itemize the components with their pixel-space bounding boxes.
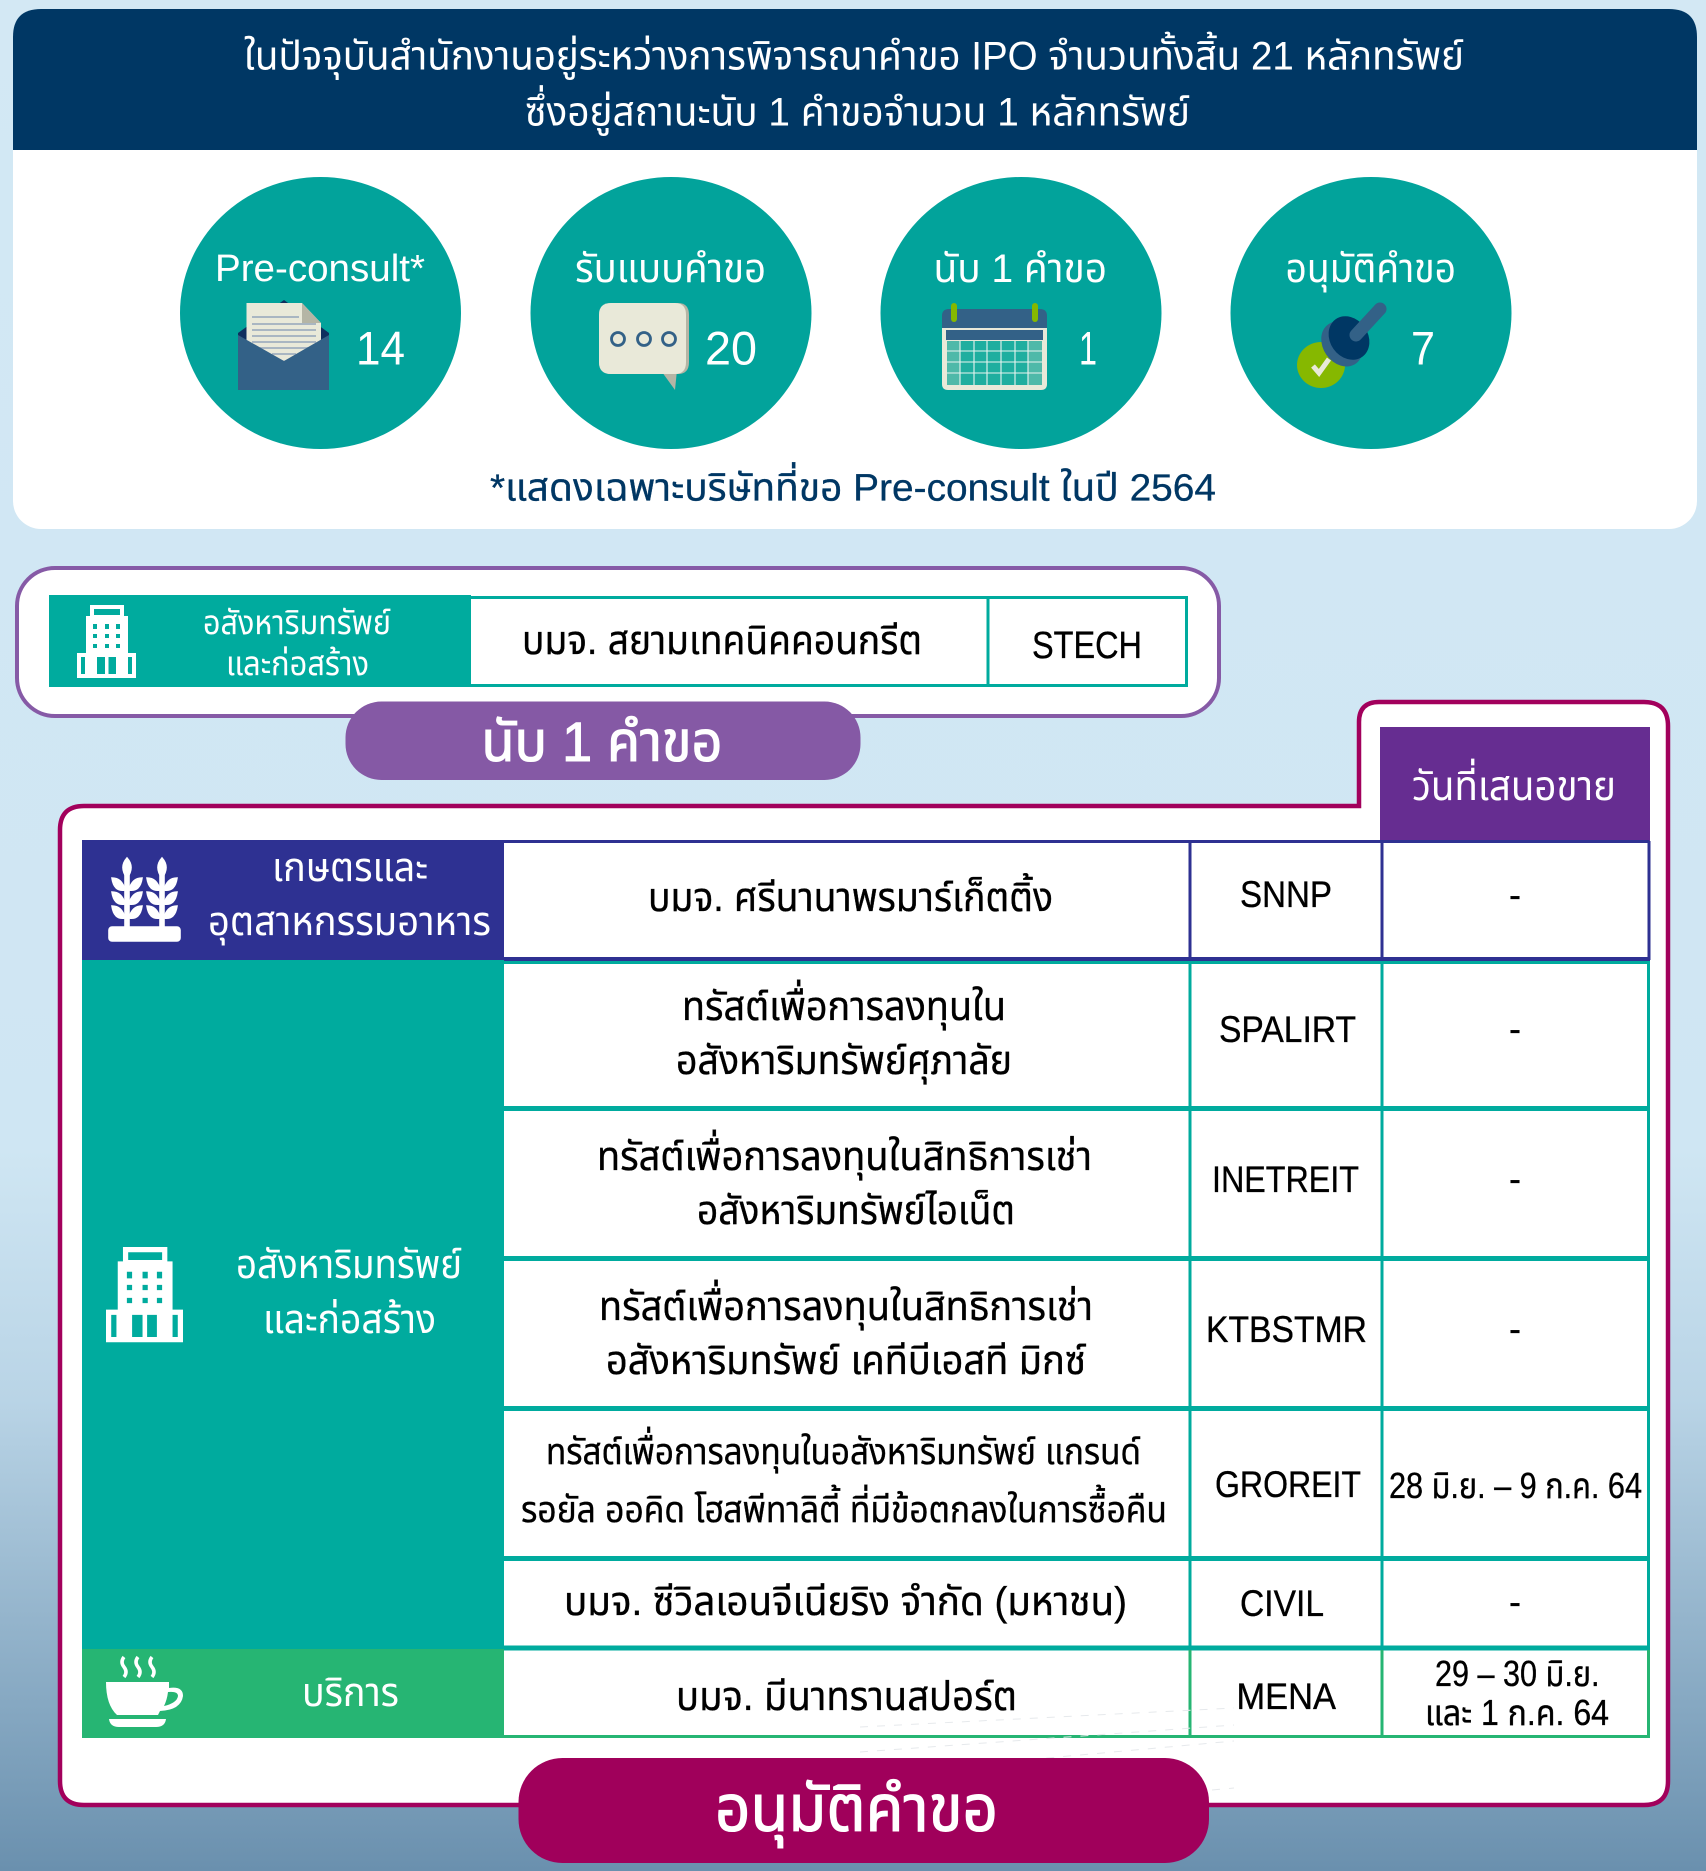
label pill: approved filings: อนุมัติคำขอ — [715, 1772, 998, 1848]
icon: speech bubble — [599, 303, 689, 390]
row: GROREIT — [521, 1426, 1642, 1530]
row: INETREIT: - — [1509, 1158, 1521, 1199]
table row: agro and food: อุตสาหกรรมอาหาร — [208, 900, 491, 945]
row: SPALIRT: อสังหาริมทรัพย์ศุภาลัย — [676, 1039, 1012, 1084]
stat: filing received: รับแบบคำขอ — [575, 247, 766, 291]
table row: services: MENA — [1236, 1676, 1336, 1717]
table row: agro and food: - — [1509, 874, 1521, 915]
table section: property and construction: และก่อสร้าง — [263, 1298, 436, 1342]
stat: approved: อนุมัติคำขอ — [1286, 247, 1456, 292]
table row: services — [82, 1649, 1650, 1738]
label pill: approved filings — [518, 1758, 1209, 1863]
header band — [13, 9, 1697, 150]
row: GROREIT: รอยัล ออคิด โฮสพีทาลิตี้ ที่มีข้อตกลงในการซื้อคืน — [521, 1484, 1167, 1530]
row: STECH: และก่อสร้าง — [226, 645, 369, 683]
stat: pre-consult — [180, 177, 461, 449]
stat: approved — [1230, 177, 1512, 449]
table row: services: และ 1 ก.ค. 64 — [1425, 1692, 1609, 1733]
panel: counted as one filing — [17, 568, 1219, 716]
label pill: counted as one filing — [346, 702, 860, 780]
panel: approved filings — [60, 702, 1668, 1805]
icon: calendar — [942, 303, 1047, 390]
row: SPALIRT — [676, 979, 1521, 1084]
table row: services: บมจ. มีนาทรานสปอร์ต — [676, 1675, 1017, 1719]
table row: agro and food: เกษตรและ — [272, 846, 428, 890]
stat: pre-consult: 14 — [356, 322, 405, 374]
table row: services: 29 – 30 มิ.ย. — [1435, 1653, 1600, 1694]
row: KTBSTMR: ทรัสต์เพื่อการลงทุนในสิทธิการเช่า — [599, 1279, 1093, 1330]
table section: property and construction: อสังหาริมทรัพย์ — [236, 1243, 462, 1287]
table header: offering date: วันที่เสนอขาย — [1412, 758, 1616, 809]
row: SPALIRT: ทรัสต์เพื่อการลงทุนใน — [682, 979, 1006, 1030]
heading line 1: ในปัจจุบันสำนักงานอยู่ระหว่างการพิจารณาคำขอ IPO จำนวนทั้งสิ้น 21 หลักทรัพย์ — [244, 31, 1464, 80]
stat: counted as one filing — [880, 177, 1162, 449]
table header: offering date — [1380, 727, 1650, 841]
row: STECH — [49, 595, 1186, 686]
row: STECH: บมจ. สยามเทคนิคคอนกรีต — [522, 619, 922, 663]
icon: coffee cup — [106, 1657, 183, 1727]
row: INETREIT: INETREIT — [1212, 1159, 1359, 1200]
footnote: *แสดงเฉพาะบริษัทที่ขอ Pre-consult ในปี 2564 — [490, 462, 1216, 510]
row: CIVIL: CIVIL — [1240, 1583, 1324, 1624]
table section: property and construction — [82, 960, 1650, 1650]
row: SPALIRT: - — [1509, 1008, 1521, 1049]
row: CIVIL: บมจ. ซีวิลเอนจีเนียริง จำกัด (มหาชน) — [564, 1580, 1127, 1624]
row: GROREIT: ทรัสต์เพื่อการลงทุนในอสังหาริมทรัพย์ แกรนด์ — [546, 1426, 1141, 1474]
stat: pre-consult: Pre-consult* — [215, 248, 425, 290]
table row: agro and food: บมจ. ศรีนานาพรมาร์เก็ตติ้ง — [648, 872, 1053, 920]
row: INETREIT — [597, 1129, 1521, 1233]
row: CIVIL — [564, 1580, 1521, 1624]
icon: building — [77, 605, 136, 678]
row: STECH: อสังหาริมทรัพย์ — [203, 604, 391, 642]
stat: counted as one filing: 1 — [1079, 322, 1097, 374]
table row: agro and food: SNNP — [1240, 874, 1332, 915]
stat: filing received — [530, 177, 812, 449]
icon: building — [106, 1247, 183, 1342]
row: STECH: STECH — [1032, 625, 1142, 667]
row: KTBSTMR: KTBSTMR — [1206, 1309, 1367, 1350]
panel: IPO summary — [13, 9, 1697, 529]
row: GROREIT: 28 มิ.ย. – 9 ก.ค. 64 — [1389, 1465, 1642, 1506]
label pill: counted as one filing: นับ 1 คำขอ — [482, 710, 722, 773]
table row: agro and food — [82, 840, 1650, 962]
row: INETREIT: ทรัสต์เพื่อการลงทุนในสิทธิการเช่า — [597, 1129, 1092, 1180]
stat: approved: 7 — [1411, 322, 1435, 374]
row: KTBSTMR: อสังหาริมทรัพย์ เคทีบีเอสที มิกซ์ — [606, 1339, 1086, 1383]
icon: envelope — [238, 300, 329, 390]
row: KTBSTMR: - — [1509, 1308, 1521, 1349]
panel background — [13, 9, 1697, 529]
heading line 2: ซึ่งอยู่สถานะนับ 1 คำขอจำนวน 1 หลักทรัพย์ — [525, 84, 1190, 136]
icon: plants — [109, 858, 180, 941]
row: CIVIL: - — [1509, 1581, 1521, 1622]
table row: services: บริการ — [302, 1671, 399, 1715]
row: INETREIT: อสังหาริมทรัพย์ไอเน็ต — [697, 1189, 1015, 1233]
stat: filing received: 20 — [705, 322, 757, 374]
row: KTBSTMR — [599, 1279, 1521, 1383]
row: GROREIT: GROREIT — [1215, 1464, 1361, 1505]
row: SPALIRT: SPALIRT — [1219, 1009, 1356, 1050]
stat: counted as one filing: นับ 1 คำขอ — [934, 247, 1107, 291]
icon: approval stamp — [1297, 308, 1380, 388]
